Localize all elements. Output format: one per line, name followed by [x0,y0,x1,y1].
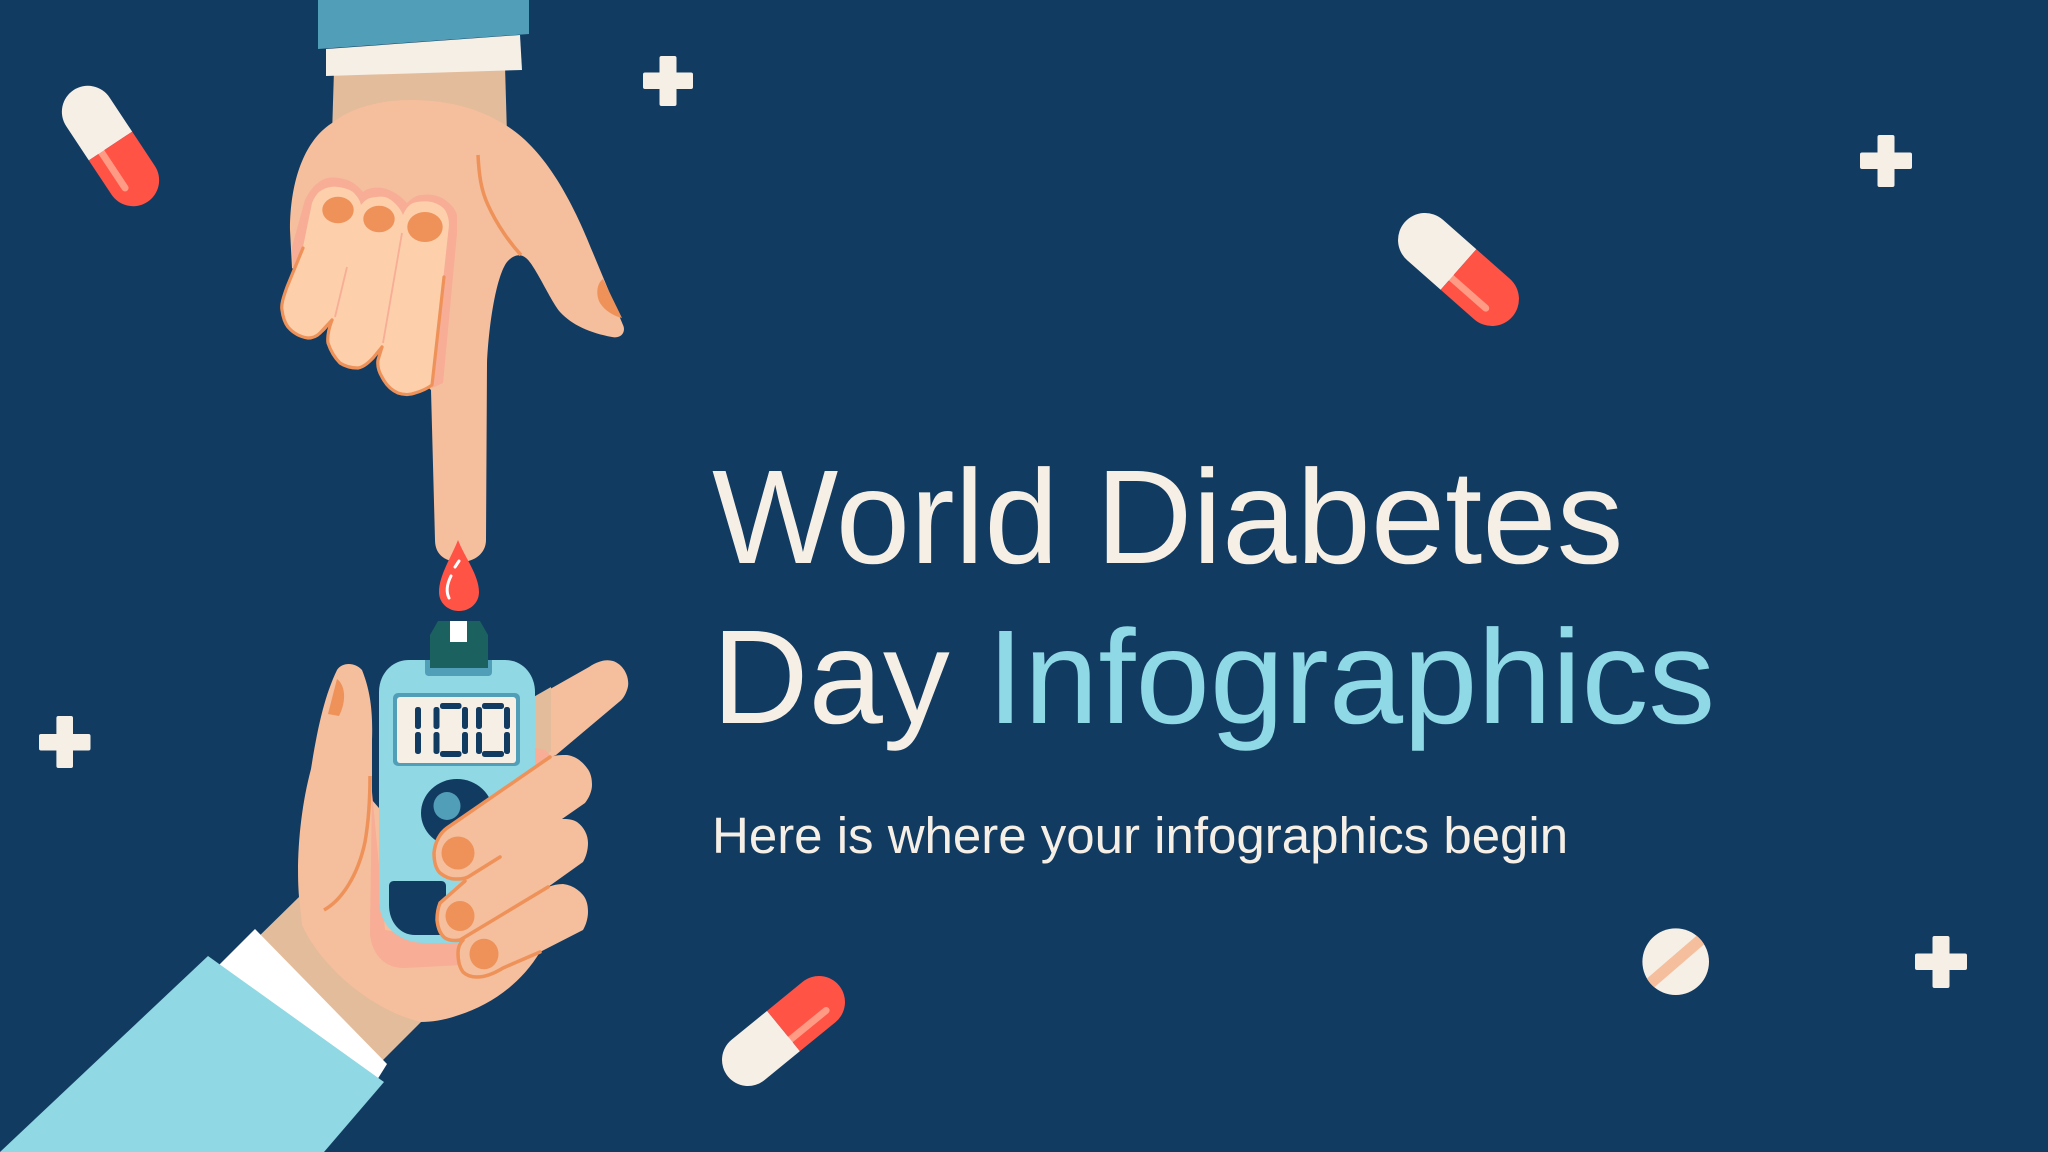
folded fingers [282,187,449,394]
screen frame [393,693,520,766]
lines between fingers [335,233,402,343]
decoration: plus sign top right [1860,135,1912,187]
decoration: capsule top left [52,76,169,216]
wrist [250,897,421,1075]
title: World Diabetes [712,443,1623,592]
folded fingers shadow [292,178,457,388]
pink web at finger base [535,748,552,768]
sleeve: light blue [0,956,384,1152]
thumb crease [324,776,370,910]
finger outlines [434,757,550,977]
thumb nail [597,279,622,318]
index finger shaded base [530,687,551,770]
gripping fingers [434,755,592,977]
index finger behind meter [520,660,628,770]
finger outlines [282,248,444,394]
decoration: capsule top right [1387,202,1530,337]
illustration: upper hand pointing down [282,0,624,562]
strip slot [425,660,492,676]
thumb crease [478,155,521,255]
thumb nail [328,679,344,716]
decoration: plus sign top [643,56,693,106]
icon: blood drop [439,540,479,611]
illustration: lower hand holding glucose meter [0,621,628,1152]
subtitle: Here is where your infographics begin [712,807,1568,864]
sleeve: blue [318,0,529,49]
glucose meter [379,621,535,943]
palm shadow [370,792,462,968]
decoration: plus sign bottom right [1915,936,1967,988]
white cuff [212,929,387,1080]
wrist [332,66,507,135]
round button [421,779,493,847]
hand with index finger and thumb [290,100,624,562]
decoration: plus sign left [39,716,90,768]
decoration: round tablet [1640,928,1712,995]
screen [397,697,516,763]
meter body [379,660,535,943]
display digits 100 [415,703,510,757]
shirt cuff [326,35,522,76]
button centre [434,792,460,820]
finger nails [322,197,443,242]
palm and thumb [298,664,540,1022]
meter cap [430,621,488,668]
decoration: capsule bottom [711,965,856,1097]
finger nails [442,836,498,969]
title: second line: Day Infographics [712,603,1715,752]
lower button [389,881,446,935]
test strip [450,621,467,642]
